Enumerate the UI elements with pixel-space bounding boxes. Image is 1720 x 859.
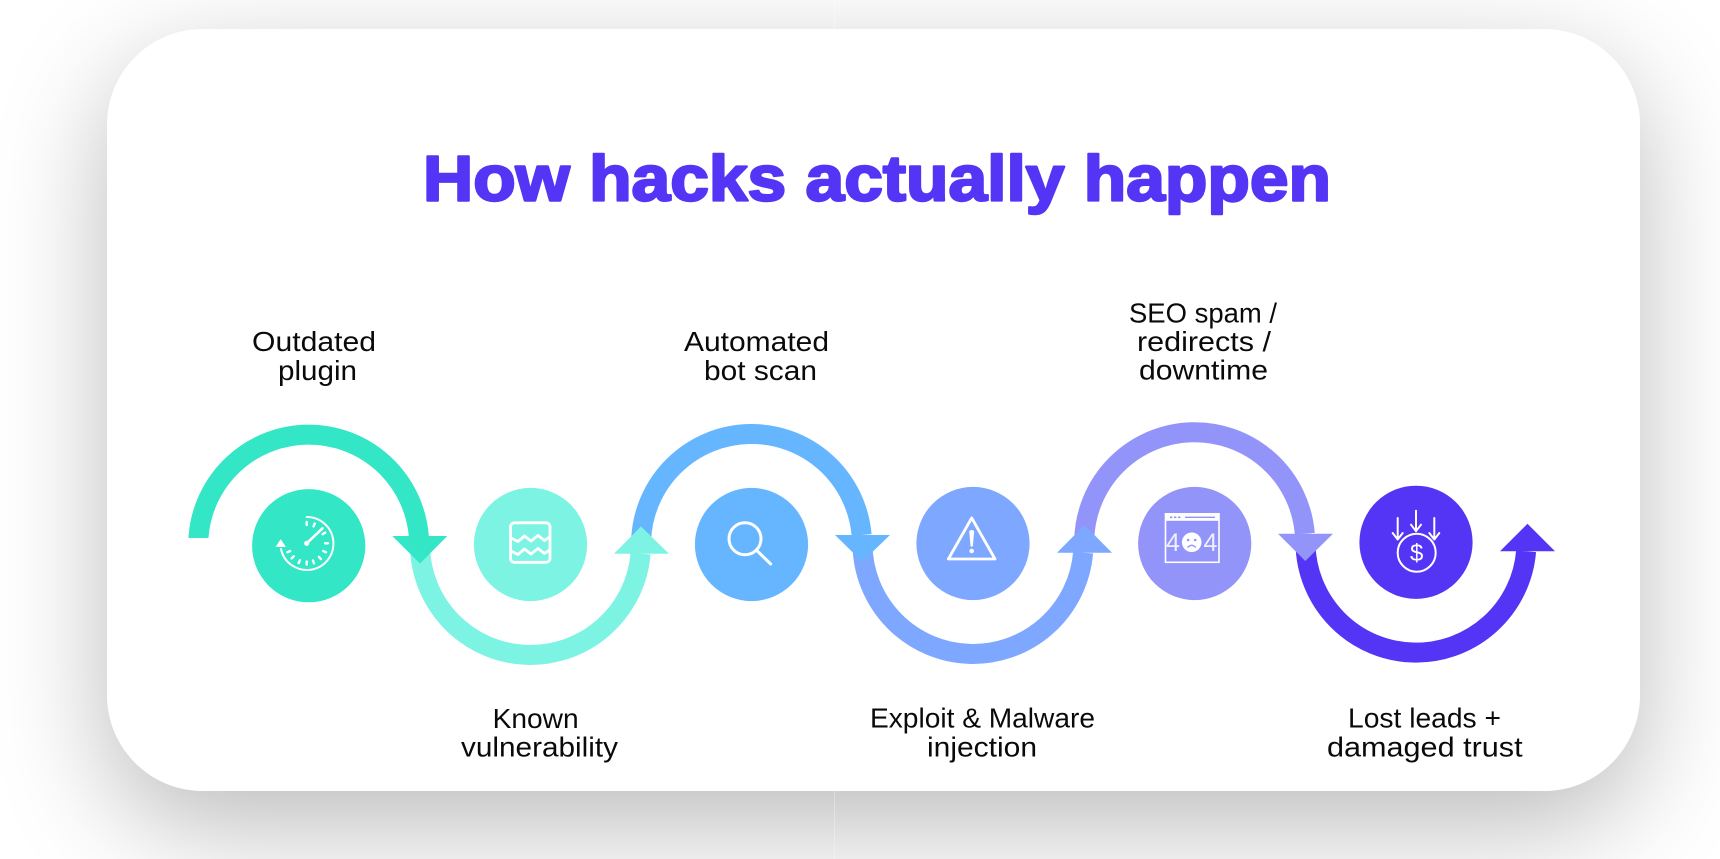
icon: 404 browser window: 4 [1166,529,1180,557]
step 5 label: SEO spam / redirects / downtime: SEO spam / [1129,298,1277,329]
step 2 label: Known vulnerability: vulnerability [461,732,618,763]
step 6 label: Lost leads + damaged trust: damaged trust [1327,732,1523,763]
icon: falling coin with down arrows [1393,511,1439,572]
circle 6 [1359,486,1473,599]
step 1 label: Outdated plugin: Outdated [252,326,376,357]
step 6 label: Lost leads + damaged trust: Lost leads + [1348,703,1501,734]
arrow 3 down [835,535,890,562]
step 5 label: SEO spam / redirects / downtime [1129,298,1277,386]
arrow 1 down [392,536,447,564]
arc 5 [1084,432,1305,540]
icon: 404 browser window: 4 [1204,529,1218,557]
icon: magnifying glass [729,523,771,564]
step 5 label: SEO spam / redirects / downtime: downtime [1139,354,1268,386]
step 4 label: Exploit & Malware injection: injection [927,732,1037,763]
circle 4 [916,487,1030,600]
icon: warning triangle [948,518,995,559]
step 4 label: Exploit & Malware injection: Exploit & Malware [870,703,1095,734]
title: How hacks actually happen [423,142,1331,214]
step 6 label: Lost leads + damaged trust [1327,703,1523,763]
icon: cracked card [510,523,550,562]
arc 6 [1306,544,1526,653]
step 3 label: Automated bot scan: Automated [684,326,829,357]
panel: white rounded card with soft shadow [107,29,1640,791]
step 2 label: Known vulnerability [461,703,618,763]
circle 5 [1138,487,1251,600]
arrow 6 up [1500,524,1555,551]
arrow 4 up [1057,525,1112,553]
icon: stopwatch with rewind arrow [276,517,333,570]
step 2 label: Known vulnerability: Known [493,703,579,734]
circle 3 [695,488,808,601]
arrow 5 down [1278,534,1333,561]
icon: 404 browser window [1166,514,1219,562]
circle 2 [474,488,587,601]
arc 4 [862,545,1083,654]
icon: falling coin with down arrows: $ [1410,540,1423,567]
step 4 label: Exploit & Malware injection [870,703,1095,763]
circle 1 [252,489,365,602]
step 1 label: Outdated plugin [252,326,376,386]
arrow 2 up [614,526,669,554]
arc 2 [420,546,641,655]
step 1 label: Outdated plugin: plugin [278,355,357,386]
step 3 label: Automated bot scan: bot scan [704,355,817,386]
wave arcs [198,432,1526,655]
arc 3 [641,434,862,540]
step 5 label: SEO spam / redirects / downtime: redirects / [1137,326,1271,357]
step 3 label: Automated bot scan [684,326,829,386]
arc 1 [198,435,419,538]
